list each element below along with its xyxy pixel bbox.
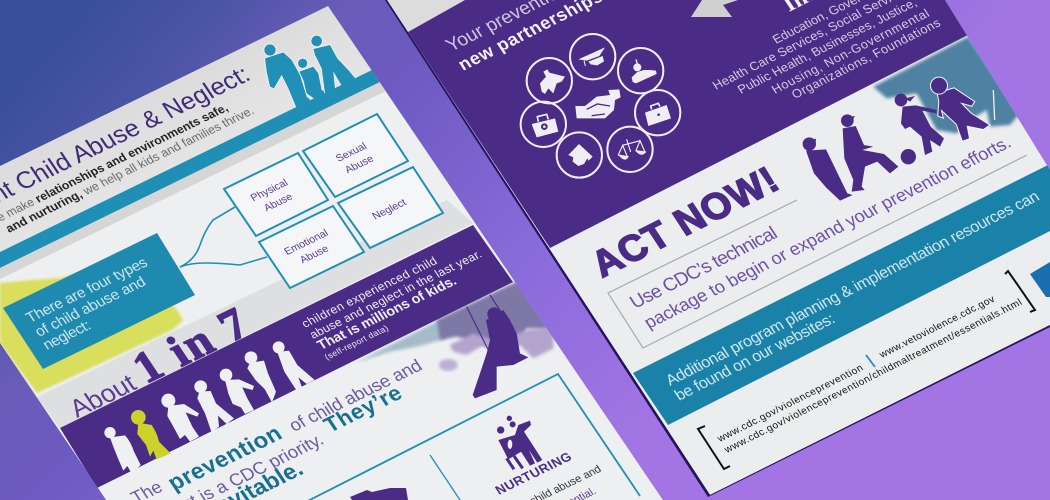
act now heading: ACT NOW! [584, 160, 786, 286]
stat text: (self-report data) [323, 323, 390, 362]
blue callout box: neglect: [40, 317, 94, 353]
teal resource band [633, 164, 1050, 425]
yellow watercolor [0, 272, 183, 393]
website addresses: www.vetoviolence.cdc.gov [877, 294, 997, 361]
icon: capitol [632, 59, 657, 83]
sector list: Organizations, Foundations [789, 16, 943, 102]
purple stat band [60, 225, 513, 488]
box: physical abuse [224, 153, 328, 236]
box: neglect: Neglect [370, 197, 409, 222]
blue callout box: There are four types [23, 254, 151, 326]
blue callout box [3, 233, 195, 369]
url divider [866, 355, 875, 367]
sheet paper [387, 0, 1050, 495]
sheet paper [0, 6, 663, 500]
row of seven children [104, 341, 315, 473]
box: sexual abuse [303, 114, 408, 197]
connector lines [180, 207, 267, 267]
blue callout box: of child abuse and [32, 274, 149, 340]
box: physical abuse: Physical [248, 177, 290, 204]
prevention statement: of child abuse and [285, 356, 426, 435]
child 1 [104, 427, 141, 473]
grey band [37, 200, 473, 428]
prevention statement [127, 356, 426, 500]
nurturing label: NURTURING [492, 449, 574, 497]
girl on swing [467, 295, 528, 398]
icon: scales [618, 139, 645, 159]
About label: About [64, 368, 142, 423]
left flyer sheet [0, 6, 663, 500]
grey top corner [387, 0, 465, 32]
prevention statement: prevention [162, 420, 286, 495]
child 5 [220, 369, 254, 414]
partner icon ring [521, 34, 680, 178]
stat text: children experienced child [299, 254, 440, 330]
child 4 [194, 380, 234, 432]
girl with ponytail [895, 94, 944, 155]
stat text: abuse and neglect in the last year. [307, 247, 485, 341]
boy standing [802, 137, 853, 201]
watercolor wash [357, 282, 553, 371]
blue watercolor [873, 37, 1020, 133]
right sheet shadow [385, 0, 1050, 497]
child 3 [161, 394, 199, 442]
child 6 [245, 351, 276, 402]
left bracket [698, 426, 730, 469]
header band [0, 6, 372, 252]
box: emotional abuse: Abuse [298, 243, 331, 266]
resource band text: be found on our websites: [672, 311, 838, 404]
teal header stripe [0, 70, 380, 268]
box: neglect [338, 167, 443, 248]
right flyer sheet [387, 0, 1050, 495]
boy kicking [841, 114, 898, 192]
icon: schoolhouse [540, 69, 565, 94]
child 2, highlighted [131, 410, 171, 459]
prevention statement: They’re [319, 380, 406, 437]
house icon [350, 488, 408, 500]
sector list: Housing, Non-Governmental [769, 6, 932, 97]
box: emotional abuse [259, 206, 364, 288]
box: physical abuse: Abuse [262, 191, 295, 214]
family icon [497, 416, 542, 469]
box: sexual abuse: Sexual [334, 140, 369, 165]
1 in 7 figure: 1 in 7 [123, 298, 258, 392]
right bracket [1005, 271, 1035, 312]
child 7 [273, 341, 315, 391]
CDC logo [1030, 262, 1050, 297]
resource band text: Additional program planning & implementation resources can [663, 188, 1043, 389]
website addresses: www.cdc.gov/violenceprevention/childmaltreatment/essentials.html [722, 297, 1024, 456]
children playing silhouettes [802, 78, 989, 201]
hatched stripe [0, 82, 386, 279]
ball [901, 149, 916, 164]
technical package frame [608, 155, 1027, 348]
intro line two: and nurturing, we help all kids and families thrive. [3, 104, 257, 235]
purple panel [408, 0, 968, 248]
box: emotional abuse: Emotional [282, 227, 331, 258]
technical package text: package to begin or expand your prevention efforts. [640, 132, 1015, 332]
icon: house [568, 144, 593, 166]
outlined benefits box [290, 374, 640, 500]
icon: briefcase [645, 103, 671, 126]
family silhouette [264, 36, 357, 108]
technical package text: Use CDC’s technical [626, 223, 782, 313]
box: sexual abuse: Abuse [343, 153, 376, 176]
girl with white outline [931, 78, 989, 141]
icon: medical kit [532, 114, 558, 137]
stat text: That is millions of kids. [314, 273, 459, 352]
rings [521, 34, 680, 178]
icon: handshake [575, 89, 621, 118]
icon: graduation cap [578, 47, 605, 66]
arrow [691, 0, 738, 17]
website addresses: www.cdc.gov/violenceprevention [715, 363, 865, 445]
